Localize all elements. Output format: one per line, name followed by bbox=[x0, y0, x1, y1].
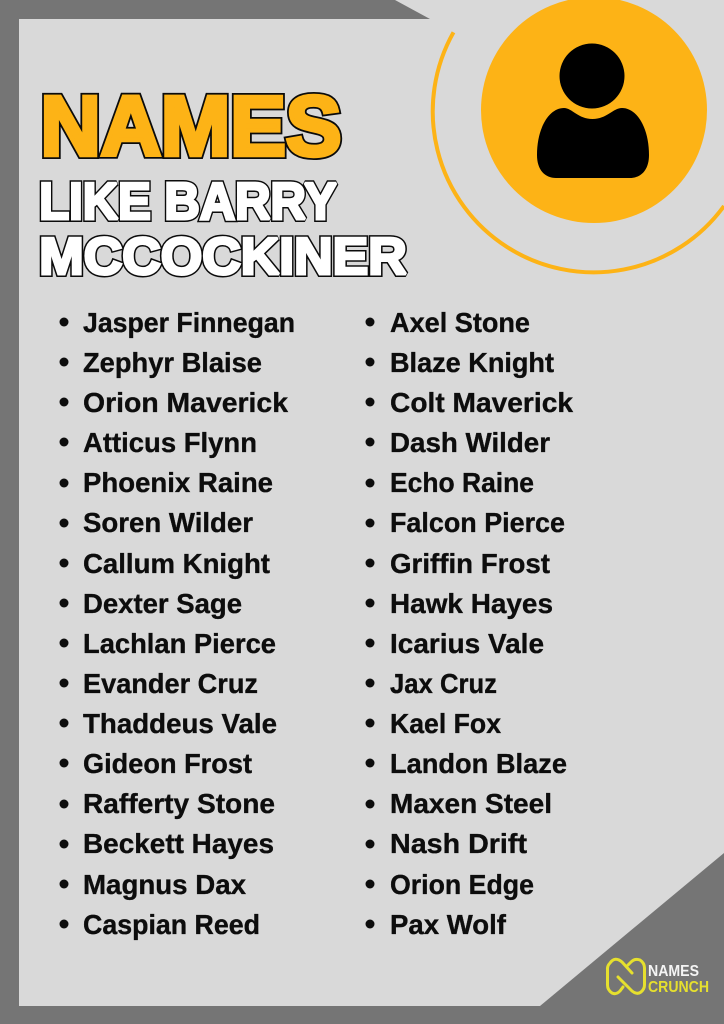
name: Gideon Frost: Gideon Frost bbox=[83, 748, 252, 779]
logo text: CRUNCH: CRUNCH bbox=[648, 979, 709, 996]
name: Dash Wilder: Dash Wilder bbox=[390, 427, 550, 458]
logo: Names Crunch bbox=[607, 959, 709, 996]
name: Orion Edge: Orion Edge bbox=[390, 869, 534, 900]
name: Jax Cruz: Jax Cruz bbox=[390, 668, 497, 699]
heading: NAMES: NAMES bbox=[40, 79, 342, 173]
heading: MCCOCKINER: MCCOCKINER bbox=[39, 228, 407, 286]
name: Dexter Sage: Dexter Sage bbox=[83, 588, 242, 619]
name: Axel Stone: Axel Stone bbox=[390, 307, 530, 338]
yellow circle bbox=[481, 0, 707, 223]
heading: LIKE BARRY: LIKE BARRY bbox=[39, 173, 337, 231]
name: Pax Wolf: Pax Wolf bbox=[390, 909, 507, 940]
title bbox=[39, 79, 407, 286]
name: Maxen Steel: Maxen Steel bbox=[390, 788, 552, 819]
name: Colt Maverick: Colt Maverick bbox=[390, 387, 573, 418]
name: Soren Wilder: Soren Wilder bbox=[83, 507, 253, 538]
name: Thaddeus Vale: Thaddeus Vale bbox=[83, 708, 277, 739]
name: Icarius Vale: Icarius Vale bbox=[390, 628, 544, 659]
name: Falcon Pierce: Falcon Pierce bbox=[390, 507, 565, 538]
name: Caspian Reed: Caspian Reed bbox=[83, 909, 260, 940]
name: Nash Drift: Nash Drift bbox=[390, 828, 527, 859]
name: Hawk Hayes: Hawk Hayes bbox=[390, 588, 553, 619]
person body bbox=[537, 108, 649, 178]
heading: MCCOCKINER: MCCOCKINER bbox=[39, 228, 407, 286]
decorative arc ring bbox=[433, 32, 724, 272]
name list: right column bbox=[366, 307, 573, 940]
name: Griffin Frost: Griffin Frost bbox=[390, 548, 550, 579]
name: Atticus Flynn: Atticus Flynn bbox=[83, 427, 257, 458]
name: Zephyr Blaise: Zephyr Blaise bbox=[83, 347, 262, 378]
name: Evander Cruz: Evander Cruz bbox=[83, 668, 258, 699]
heading: LIKE BARRY: LIKE BARRY bbox=[39, 173, 337, 231]
name: Echo Raine: Echo Raine bbox=[390, 467, 534, 498]
name: Phoenix Raine: Phoenix Raine bbox=[83, 467, 273, 498]
heading: NAMES: NAMES bbox=[40, 79, 342, 173]
name: Blaze Knight: Blaze Knight bbox=[390, 347, 554, 378]
person head bbox=[560, 44, 624, 108]
name: Rafferty Stone: Rafferty Stone bbox=[83, 788, 275, 819]
name: Kael Fox: Kael Fox bbox=[390, 708, 501, 739]
logo text: NAMES: NAMES bbox=[648, 963, 699, 980]
name: Lachlan Pierce: Lachlan Pierce bbox=[83, 628, 276, 659]
name: Landon Blaze: Landon Blaze bbox=[390, 748, 567, 779]
name: Callum Knight: Callum Knight bbox=[83, 548, 270, 579]
name: Magnus Dax: Magnus Dax bbox=[83, 869, 246, 900]
name: Jasper Finnegan: Jasper Finnegan bbox=[83, 307, 295, 338]
icon: person in yellow circle bbox=[433, 0, 724, 272]
name: Orion Maverick: Orion Maverick bbox=[83, 387, 288, 418]
name: Beckett Hayes: Beckett Hayes bbox=[83, 828, 274, 859]
logo mark bbox=[607, 959, 644, 994]
name list: left column bbox=[60, 307, 295, 940]
